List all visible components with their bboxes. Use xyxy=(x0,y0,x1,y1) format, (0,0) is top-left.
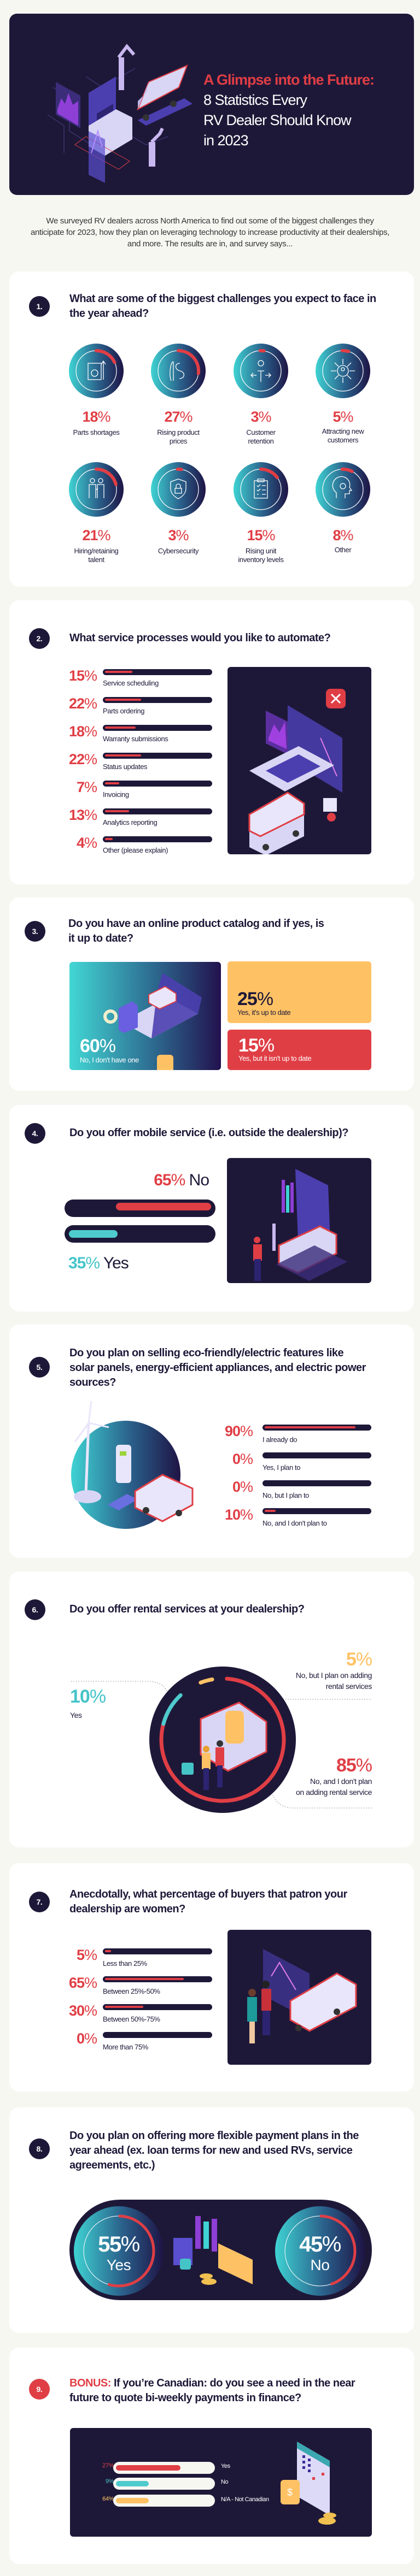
question 8 heading: Do you plan on offering more flexible payment plans in the year ahead (ex. loan terms for new and used RVs, service agreements, etc.) xyxy=(69,2130,359,2171)
panel: question 5 eco features xyxy=(9,1325,414,1558)
title: A Glimpse into the Future: xyxy=(203,72,374,88)
panel: question 9 bonus xyxy=(9,2348,414,2564)
stat row 1: Rising product prices xyxy=(157,428,200,445)
stat row 1: Customer retention xyxy=(246,428,276,445)
bar chart: eco features: No, but I plan to xyxy=(262,1491,309,1499)
bar chart: women buyers: 65% xyxy=(69,1975,97,1991)
bar chart: mobile service xyxy=(65,1171,215,1272)
stat: 55% yes xyxy=(98,2232,139,2273)
illustration: women and rv xyxy=(228,1930,371,2065)
stat row 2: 8% xyxy=(332,527,353,543)
question 6 heading: Do you offer rental services at your dealership? xyxy=(69,1603,304,1615)
stat row 1 xyxy=(73,409,364,445)
stat row 2: 15% xyxy=(247,527,275,543)
bar chart: women buyers: 5% xyxy=(77,1947,97,1963)
stat card: 25% up to date: 25% xyxy=(237,989,273,1009)
bar chart: women buyers: Between 25%-50% xyxy=(103,1987,160,1995)
icon: calendar and coins: $ xyxy=(287,2487,293,2498)
stat row 2: Rising unit inventory levels xyxy=(238,547,284,564)
stat card: 25% up to date xyxy=(228,961,371,1023)
number badge 6 xyxy=(25,1599,45,1620)
question 3 heading: Do you have an online product catalog and if yes, is it up to date? xyxy=(68,918,324,944)
bar chart: automation: 7% xyxy=(77,779,97,795)
bar chart panel: bi-weekly: No xyxy=(221,2479,228,2485)
stat row 1: 18% xyxy=(82,409,110,425)
number badge 3 xyxy=(25,921,45,942)
stat row 2: 3% xyxy=(168,527,189,543)
60% figure: 60% xyxy=(80,1036,115,1056)
title: in 2023 xyxy=(203,132,248,149)
question 7 heading: Anecdotally, what percentage of buyers that patron your dealership are women? xyxy=(69,1888,347,1915)
stat row 1: 5% xyxy=(332,409,353,425)
panel: question 3 online catalog xyxy=(9,897,414,1091)
panel: question 1 challenges xyxy=(9,271,414,587)
bar chart: women buyers: Less than 25% xyxy=(103,1959,147,1968)
number badge 4 xyxy=(25,1123,45,1144)
number badge 1 xyxy=(29,296,50,317)
stat: 45% no xyxy=(299,2232,341,2273)
callout: 10% yes xyxy=(70,1686,106,1720)
bar chart panel: bi-weekly: 9% xyxy=(106,2478,114,2485)
title: 8 Statistics Every xyxy=(203,92,307,108)
stat card: 25% up to date: Yes, it's up to date xyxy=(237,1008,290,1017)
number badge 5 xyxy=(29,1357,50,1378)
bar chart: eco features: 0% xyxy=(232,1451,253,1467)
stat row 1: 27% xyxy=(164,409,192,425)
bar chart: women buyers: 30% xyxy=(69,2002,97,2019)
bar chart: eco features: No, and I don't plan to xyxy=(262,1519,327,1527)
panel: question 7 women buyers xyxy=(9,1863,414,2091)
bar chart: automation: Invoicing xyxy=(103,790,129,799)
panel: question 8 payment plans xyxy=(9,2107,414,2333)
callout: 10% yes: Yes xyxy=(70,1711,82,1720)
stat: 45% no: No xyxy=(311,2256,329,2273)
bar chart panel: bi-weekly xyxy=(70,2428,372,2537)
stat row 1: Parts shortages xyxy=(73,428,120,436)
bar chart: eco features xyxy=(225,1423,371,1527)
number badge 1: 1. xyxy=(37,302,42,311)
bar chart: mobile service: 65% No xyxy=(154,1171,209,1189)
bar chart: automation: 15% xyxy=(69,667,97,684)
bar chart: automation: Service scheduling xyxy=(103,679,159,687)
bar chart: women buyers: More than 75% xyxy=(103,2043,148,2051)
bar chart panel: bi-weekly: 27% xyxy=(102,2462,114,2469)
callout: 10% yes: 10% xyxy=(70,1686,106,1707)
bar chart: women buyers: 0% xyxy=(77,2030,97,2047)
callout: 85% no: on adding rental service xyxy=(296,1788,372,1797)
callout: 5% plan to add xyxy=(296,1649,372,1691)
bar chart panel: bi-weekly: N/A - Not Canadian xyxy=(221,2496,269,2503)
panel: question 6 rental services xyxy=(9,1571,414,1847)
number badge 9: 9. xyxy=(37,2385,42,2394)
icon grid xyxy=(69,344,370,517)
number badge 2 xyxy=(29,628,50,649)
illustration: wind turbine, charger, rv xyxy=(71,1401,194,1529)
stat: 45% no: 45% xyxy=(299,2232,341,2256)
callout: 5% plan to add: 5% xyxy=(346,1649,372,1670)
title xyxy=(203,72,374,149)
stat row 2: Other xyxy=(335,546,351,554)
callout: 85% no: No, and I don't plan xyxy=(310,1777,372,1786)
stat: 55% yes: Yes xyxy=(107,2256,131,2273)
pill chart: payment plans xyxy=(69,2200,372,2300)
bar chart panel: bi-weekly: Yes xyxy=(221,2463,230,2469)
bar chart: eco features: 0% xyxy=(232,1479,253,1495)
bar chart: women buyers: Between 50%-75% xyxy=(103,2015,160,2023)
number badge 2: 2. xyxy=(37,634,42,643)
number badge 3: 3. xyxy=(32,927,38,936)
title: RV Dealer Should Know xyxy=(203,112,351,128)
bar chart: mobile service: 35% Yes xyxy=(68,1254,129,1272)
bar chart: eco features: I already do xyxy=(262,1435,297,1444)
illustration: laptop and rv xyxy=(228,667,371,854)
stat row 2: 21% xyxy=(82,527,110,543)
callout: 85% no xyxy=(296,1755,372,1797)
callout: 5% plan to add: No, but I plan on adding xyxy=(296,1671,372,1680)
bar chart panel: bi-weekly: 64% xyxy=(102,2496,114,2502)
panel: question 4 mobile service xyxy=(9,1105,414,1311)
bar chart: automation: Warranty submissions xyxy=(103,735,168,743)
stat row 1: 3% xyxy=(250,409,271,425)
bar chart: automation: 22% xyxy=(69,751,97,767)
intro text: We surveyed RV dealers across North America to find out some of the biggest challenges they anticipate for 2023, how they plan on leveraging technology to increase productivity at their dealerships, and more. The results are in, and survey says... xyxy=(31,216,389,249)
question 9 heading: BONUS: If you’re Canadian: do you see a need in the near future to quote bi-weekly payments in finance? xyxy=(69,2377,355,2404)
question 1 heading: What are some of the biggest challenges you expect to face in the year ahead? xyxy=(69,293,376,320)
bar chart: automation: 13% xyxy=(69,807,97,823)
number badge 7 xyxy=(29,1892,50,1912)
bar chart: automation: Analytics reporting xyxy=(103,818,157,826)
number badge 6: 6. xyxy=(32,1605,38,1614)
stat row 2: Cybersecurity xyxy=(158,547,199,555)
stat card: 15% not up to date: 15% xyxy=(238,1035,274,1056)
number badge 8 xyxy=(29,2138,50,2159)
60% label: No, I don't have one xyxy=(80,1056,139,1064)
bar chart: automation xyxy=(69,667,212,854)
bar chart: automation: Parts ordering xyxy=(103,707,144,715)
illustration: mechanic and rv xyxy=(227,1158,371,1283)
stat row 2 xyxy=(74,527,353,564)
number badge 9 xyxy=(29,2379,50,2400)
stat card: 60% no catalog xyxy=(69,962,221,1070)
header banner xyxy=(9,14,414,195)
question 2 heading: What service processes would you like to automate? xyxy=(69,632,330,644)
stat: 55% yes: 55% xyxy=(98,2232,139,2256)
number badge 4: 4. xyxy=(32,1129,38,1138)
bar chart: eco features: Yes, I plan to xyxy=(262,1463,300,1472)
question 4 heading: Do you offer mobile service (i.e. outside the dealership)? xyxy=(69,1127,348,1139)
bar chart: automation: 4% xyxy=(77,835,97,851)
number badge 5: 5. xyxy=(37,1363,42,1372)
callout: 5% plan to add: rental services xyxy=(326,1682,372,1691)
icon: calendar and coins xyxy=(281,2442,336,2525)
bar chart: eco features: 10% xyxy=(225,1506,253,1523)
donut chart: rental xyxy=(71,1667,372,1813)
question 5 heading: Do you plan on selling eco-friendly/electric features like solar panels, energy-efficient appliances, and electric power sources? xyxy=(69,1347,366,1389)
bar chart: automation: 18% xyxy=(69,723,97,740)
bar chart: automation: Status updates xyxy=(103,763,147,771)
illustration: laptop, rv and robotic arms xyxy=(47,44,192,183)
stat row 1: Attracting new customers xyxy=(322,427,364,444)
number badge 8: 8. xyxy=(37,2144,42,2153)
bar chart: women buyers xyxy=(69,1947,212,2051)
bar chart: automation: 22% xyxy=(69,695,97,712)
bar chart: eco features: 90% xyxy=(225,1423,253,1439)
stat card: 15% not up to date: Yes, but it isn't up to date xyxy=(238,1054,311,1062)
stat card: 15% not up to date xyxy=(228,1030,371,1070)
panel: question 2 automation xyxy=(9,600,414,884)
bar chart: automation: Other (please explain) xyxy=(103,846,168,854)
number badge 7: 7. xyxy=(37,1898,42,1906)
callout: 85% no: 85% xyxy=(336,1755,372,1776)
stat row 2: Hiring/retaining talent xyxy=(74,547,119,564)
